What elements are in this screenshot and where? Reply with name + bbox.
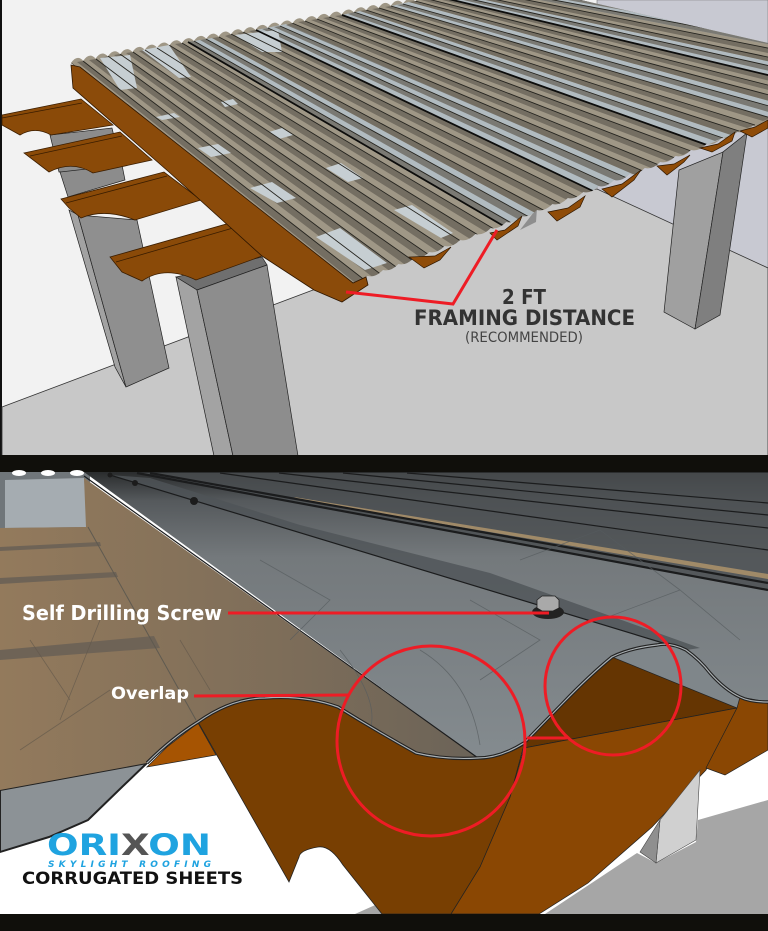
back wall: [597, 0, 768, 268]
sheet overlap lines: [188, 0, 768, 228]
main grey sheet: [84, 472, 768, 758]
right post: [664, 133, 747, 329]
right orange piece: [706, 697, 768, 775]
logo tagline: SKYLIGHT ROOFING: [48, 860, 211, 870]
skylight patches: [100, 30, 453, 270]
tan translucent sheet: [0, 478, 478, 790]
front post: [176, 257, 298, 456]
ridge lines: [84, 473, 768, 758]
far end gable: [0, 470, 90, 532]
icon: small screws: [108, 472, 198, 505]
callout: small circle: [545, 617, 681, 755]
label: framing distance: FRAMING DISTANCE: [414, 306, 635, 330]
lower grey sheet: [0, 763, 147, 852]
callout: circle connector: [527, 736, 568, 740]
label: self drilling screw: Self Drilling Screw: [22, 601, 222, 625]
inner dark orange: [524, 657, 737, 748]
label: 2 FT: 2 FT: [502, 285, 546, 309]
small orange section: [147, 723, 216, 767]
icon: self drilling screw: [532, 596, 564, 619]
beam 1: [2, 99, 113, 135]
label: overlap: Overlap: [111, 684, 189, 704]
label: recommended: (RECOMMENDED): [465, 330, 583, 346]
tan stripe: [294, 497, 768, 579]
beam 3: [61, 172, 201, 220]
divider band: [0, 455, 768, 472]
tan sheet fold: [88, 527, 196, 720]
fascia board: [71, 65, 368, 302]
ridge lines: [71, 0, 768, 292]
label: corrugated sheets: CORRUGATED SHEETS: [22, 869, 243, 889]
ridge shadow band: [110, 475, 700, 650]
orange rafter ends: [409, 120, 768, 268]
logo: ORIXON: ORI XON: [47, 828, 211, 862]
floor: [2, 189, 768, 456]
sheet bands: [188, 0, 768, 228]
sheet seen under crest: [612, 644, 740, 708]
callout: large circle: [337, 646, 525, 836]
callout: screw line: [228, 612, 549, 614]
small support under roof: [520, 208, 537, 230]
floor corner: [355, 902, 382, 914]
back-left post: [50, 128, 169, 387]
callout: framing distance line: [346, 230, 497, 304]
main brown piece: [198, 697, 524, 914]
floor: [545, 800, 768, 914]
bottom band: [0, 914, 768, 931]
sheet edge: [147, 644, 768, 763]
upper dark sheet: [137, 473, 768, 590]
beam 4: [110, 223, 265, 281]
second orange piece: [451, 708, 737, 914]
beam 2: [24, 132, 152, 173]
tan sheet bands: [0, 542, 160, 660]
corrugated roof: [60, 0, 768, 305]
support post: [640, 770, 700, 863]
panel: fastening detail: [0, 470, 768, 914]
sheet texture: [20, 530, 740, 750]
shaded corrugation sides: [77, 0, 768, 289]
panel: framing distance: [0, 0, 768, 456]
callout: overlap line: [194, 695, 348, 696]
